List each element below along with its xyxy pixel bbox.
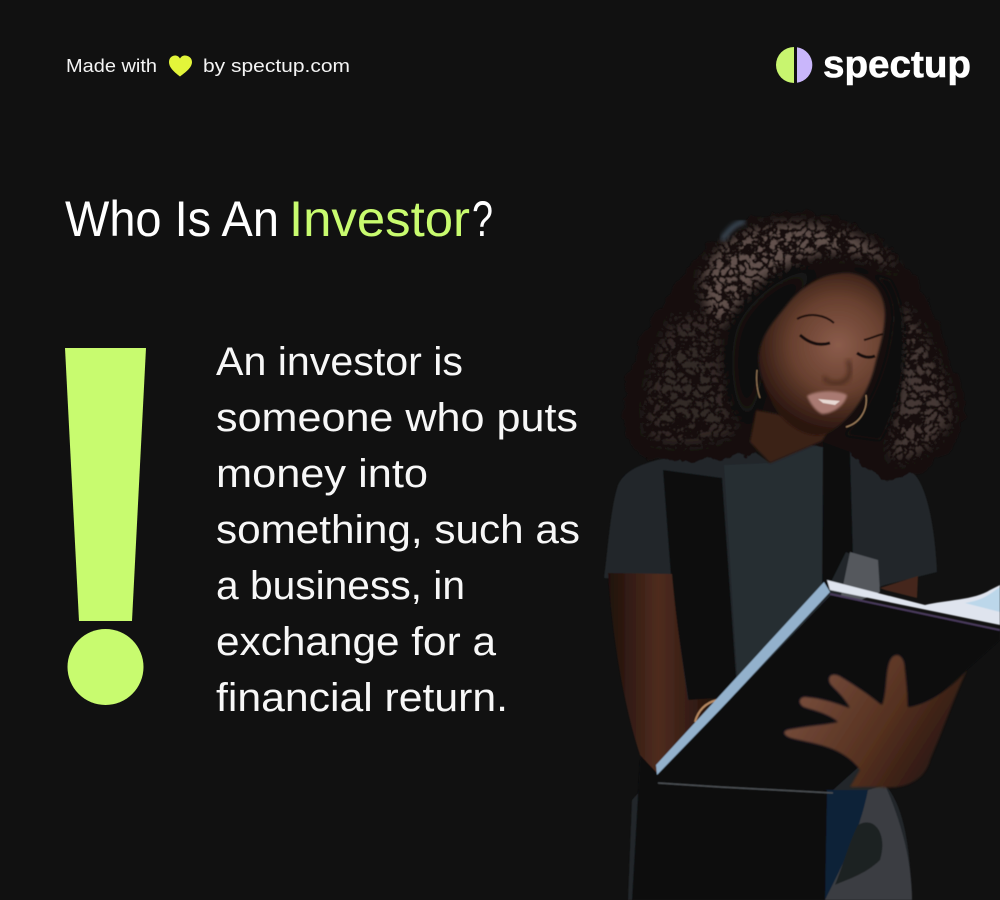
grey shirt fold	[838, 552, 880, 610]
book cover	[656, 594, 1000, 790]
made with credit: Made with	[66, 56, 157, 76]
definition text: someone who puts	[216, 396, 578, 440]
facial features	[757, 315, 883, 427]
made with credit	[66, 56, 350, 76]
definition text: An investor is	[216, 340, 463, 384]
neck	[750, 410, 832, 463]
hand holding book	[784, 655, 967, 788]
title: Who Is An	[65, 191, 279, 247]
logo wordmark: spectup	[823, 44, 971, 86]
torso highlight	[724, 442, 823, 690]
right upper arm	[880, 576, 918, 598]
definition text: something, such as	[216, 508, 580, 552]
logo mark	[776, 47, 812, 83]
hair blue sheen	[722, 222, 745, 240]
nose shadow	[824, 360, 850, 383]
illustration: woman reading a book	[604, 212, 1000, 900]
book	[656, 580, 1000, 793]
face	[759, 273, 885, 435]
vest right	[822, 442, 853, 600]
lips	[807, 391, 847, 414]
hair texture sides	[891, 300, 952, 462]
definition text: exchange for a	[216, 620, 497, 664]
earring right	[846, 395, 866, 427]
hair	[623, 212, 965, 481]
book pages	[827, 580, 1000, 625]
eyes	[800, 335, 875, 357]
bracelet	[695, 700, 717, 722]
left arm	[608, 573, 720, 773]
title	[65, 191, 493, 247]
book top edge purple	[830, 594, 1000, 630]
definition text: a business, in	[216, 564, 465, 608]
inner shadow around face	[732, 270, 815, 425]
icon: exclamation mark	[65, 348, 146, 705]
icon: heart	[169, 56, 192, 76]
earring left	[757, 370, 760, 398]
definition text: money into	[216, 452, 428, 496]
hair highlights top	[702, 224, 900, 325]
shirt	[604, 440, 937, 900]
teeth	[818, 399, 840, 405]
definition text: financial return.	[216, 676, 508, 720]
made with credit: by spectup.com	[203, 56, 350, 76]
spectup logo	[776, 44, 971, 86]
title: Investor	[289, 191, 470, 247]
vest left	[632, 470, 827, 900]
eyebrows	[797, 315, 883, 340]
shirt lower folds	[825, 785, 912, 900]
title: ?	[472, 191, 493, 247]
book spine edge	[656, 582, 830, 775]
book bottom edge	[658, 783, 833, 793]
definition text	[216, 340, 580, 720]
